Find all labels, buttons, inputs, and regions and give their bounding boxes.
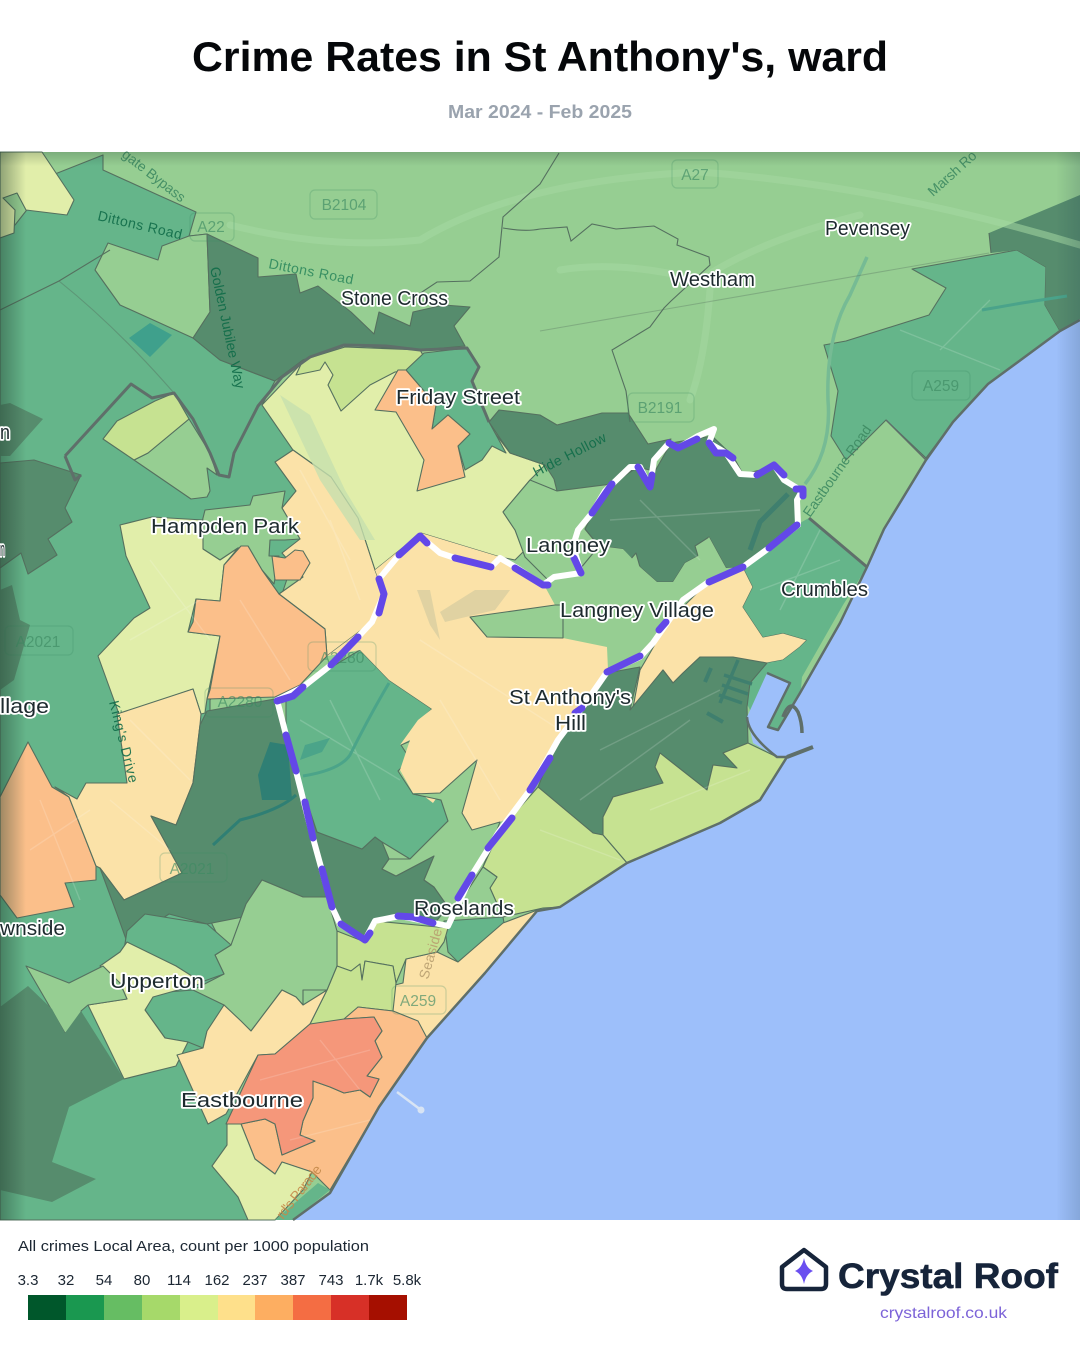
region: Seaside yellow-green ward (337, 921, 448, 983)
place labels: Hill (555, 713, 586, 735)
region: south coast yellow-green ward east (603, 743, 787, 863)
region: A2021 dark ward (100, 699, 448, 942)
region: western orange ward (0, 742, 96, 918)
place labels: n (0, 422, 10, 444)
region: Friday Street mid-green ward (406, 348, 506, 470)
region: Eastbourne orange ward (241, 1007, 427, 1190)
title: Crime Rates in St Anthony's, ward (192, 33, 888, 80)
road labels and shields: rd's Parade (273, 1161, 325, 1222)
subtitle: date range: Mar 2024 - Feb 2025 (448, 101, 632, 122)
legend tick values: 743 (318, 1272, 344, 1289)
road labels and shields: gate Bypass (119, 146, 189, 205)
region: Langney light ward (503, 480, 612, 585)
region: Langney Point cream ward (633, 567, 807, 708)
legend tick values: 5.8k (393, 1272, 422, 1289)
place labels: Friday Street (396, 387, 520, 409)
road labels and shields: Marsh Ro (924, 147, 980, 199)
sea (293, 320, 1080, 1220)
place labels: wnside (0, 918, 65, 940)
place labels: Hampden Park (151, 516, 300, 538)
region: northern yellow-green cell (296, 347, 430, 411)
place labels: Westham (670, 269, 755, 291)
legend colour scale (28, 1295, 407, 1320)
place labels: Langney (526, 535, 610, 557)
region: west dark ward 3 (0, 585, 30, 690)
legend tick values: 54 (96, 1272, 112, 1289)
legend tick values: 80 (134, 1272, 150, 1289)
road labels and shields: A2280 (218, 694, 263, 711)
legend tick values: 237 (242, 1272, 268, 1289)
legend tick values: 162 (204, 1272, 230, 1289)
road labels and shields (5, 146, 980, 1222)
logo: Crystal Roof (782, 1250, 1058, 1322)
legend tick values: 387 (280, 1272, 306, 1289)
region: south pale ward (212, 1124, 312, 1220)
St Anthony's ward boundary: white line (277, 429, 802, 940)
road labels and shields: A259 (923, 378, 959, 395)
place labels: Roselands (414, 898, 514, 920)
thick district boundaries and coastline (65, 320, 1080, 1220)
legend (18, 1238, 422, 1320)
map edge shading (0, 152, 1080, 1220)
region: north-east dark ward (989, 195, 1080, 331)
region: north-west light ward (95, 234, 210, 338)
region: south-west dark ward (0, 986, 124, 1202)
region: Hampden pale ward (98, 517, 238, 714)
place labels: llage (0, 696, 49, 718)
region: north-east mid-green ward (824, 250, 1060, 460)
region: Hampden Park orange lobe (272, 550, 310, 580)
place labels: Upperton (110, 971, 204, 993)
wordmark: Crystal Roof (838, 1257, 1058, 1296)
road labels and shields: Dittons Road (96, 207, 184, 242)
legend title: All crimes Local Area, count per 1000 population (18, 1238, 369, 1255)
region: Hampden Park orange ward (188, 546, 327, 699)
region: Hampden Park light cell (200, 491, 300, 584)
region: Seaside lower yellow-green (310, 961, 396, 1024)
region: west dark wards (0, 403, 43, 456)
region: Roselands light cell (445, 867, 503, 932)
place labels: Stone Cross (341, 288, 448, 310)
road labels and shields: A22 (197, 219, 225, 236)
legend tick values: 32 (58, 1272, 74, 1289)
region: Hampden Park cream ward (275, 450, 386, 656)
region: King's Drive cream ward (55, 689, 201, 900)
region: west of Upperton light ward (26, 966, 127, 1033)
region: Stone Cross dark ward (193, 234, 470, 381)
road labels and shields: A2280 (320, 650, 365, 667)
region: south coast yellow-green ward west (483, 787, 627, 917)
region: harbour dark ward (538, 657, 767, 835)
region: ward west mid-green (286, 650, 448, 859)
region: Eastbourne red-orange ward (226, 1017, 382, 1155)
legend tick values: 1.7k (355, 1272, 384, 1289)
road labels and shields: Hide Hollow (530, 429, 609, 480)
region: Friday Street pale ward (262, 347, 545, 570)
place labels: Crumbles (781, 579, 868, 601)
region: western mid-green wards (0, 155, 300, 1220)
place labels: Pevensey (825, 218, 910, 240)
map water features (129, 257, 1067, 845)
road labels and shields: B2104 (322, 197, 367, 214)
region: St Anthony's cream ward (327, 533, 608, 830)
region: ward south light cell (382, 760, 500, 925)
region: Upperton east light ward (193, 880, 337, 1031)
region: Willingdon light cell (134, 419, 217, 499)
road labels and shields: A2021 (16, 634, 60, 651)
map thin boundary lines (0, 153, 991, 422)
road labels and shields: Golden Jubilee Way (207, 265, 248, 390)
place labels: St Anthony's (509, 687, 631, 709)
place labels: n (0, 539, 5, 561)
region: top-left pale ward (0, 152, 74, 238)
region: Hide Hollow dark ward (489, 410, 671, 491)
road labels and shields: King's Drive (106, 699, 142, 784)
region: Upperton mid-green south (145, 990, 234, 1048)
region: Upperton mid-green north (124, 914, 231, 985)
road labels and shields: A2021 (170, 861, 214, 878)
road labels and shields: A259 (400, 993, 436, 1010)
region: Eastbourne coastal strip (275, 1183, 330, 1220)
legend tick values: 114 (167, 1272, 191, 1289)
map street network (30, 300, 1000, 1140)
choropleth map panel (0, 146, 1080, 1222)
icon: house with star (782, 1250, 826, 1289)
pier (397, 1092, 424, 1114)
St Anthony's ward boundary: purple dashes (277, 439, 803, 940)
region: Eastbourne cream ward (177, 990, 327, 1124)
region: Langney dark ward (585, 436, 798, 582)
road labels and shields: Seaside (416, 926, 445, 981)
place labels: Langney Village (560, 600, 714, 622)
road labels and shields: Eastbourne Road (799, 422, 874, 520)
legend tick values: 3.3 (18, 1272, 38, 1289)
legend tick values (18, 1272, 422, 1289)
region: coastal cream A259 ward (391, 909, 540, 1038)
region: Seaside mid-green cell (444, 917, 504, 962)
region: Upperton pale ward (88, 942, 203, 1079)
place labels (0, 218, 910, 1112)
road labels and shields: B2191 (638, 400, 682, 417)
region: ward light-green notch (470, 605, 563, 638)
road labels and shields: A27 (681, 167, 709, 184)
road labels and shields: Dittons Road (267, 255, 355, 287)
region: west dark ward 2 (0, 460, 81, 574)
website url: crystalroof.co.uk (880, 1305, 1008, 1322)
region: Crumbles mid-green ward (743, 518, 867, 730)
place labels: Eastbourne (181, 1090, 303, 1112)
region: Langney Village light ward (470, 537, 743, 670)
region: Willingdon pale cell (103, 393, 189, 460)
region: Friday Street orange ward (375, 370, 470, 491)
map roads (230, 172, 1080, 400)
